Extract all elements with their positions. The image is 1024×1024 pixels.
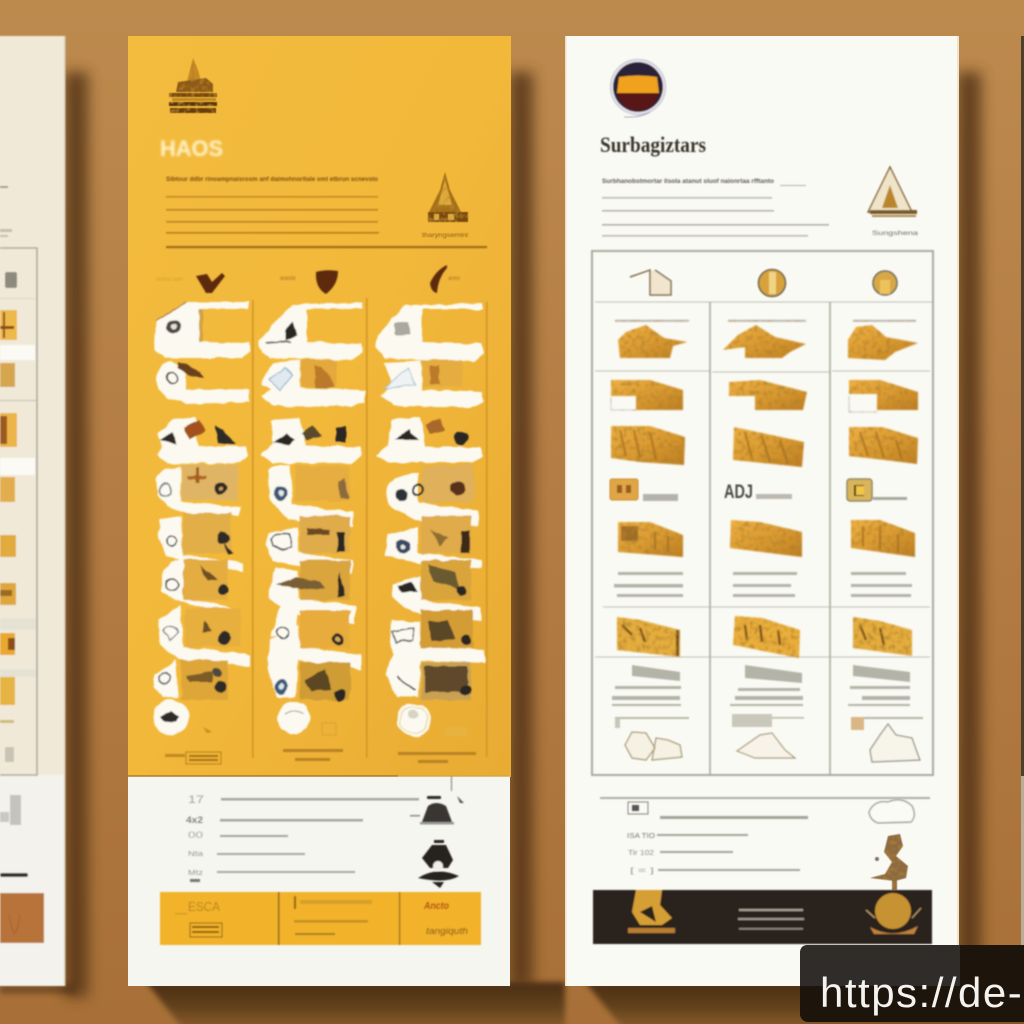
column 2 stepped cards <box>259 303 364 734</box>
gold row 3 <box>611 426 918 467</box>
icon: black stove <box>410 796 464 824</box>
dark footer bar <box>593 890 932 944</box>
panel: left cropped poster <box>0 36 66 986</box>
icon: small temple <box>422 172 468 239</box>
footer list: Mtz <box>188 870 204 877</box>
footer list: Tir 102 <box>628 850 654 857</box>
row icons <box>159 320 235 723</box>
gold row 1 <box>615 320 918 360</box>
footer list <box>600 797 930 875</box>
icon: black figure <box>418 840 459 888</box>
footer list: ISA TIO <box>627 833 656 840</box>
row images <box>181 465 241 700</box>
footer list <box>186 776 452 882</box>
footer list: [ = ] <box>630 868 654 875</box>
footer list: 17 <box>188 794 204 806</box>
icon: round logo <box>610 60 666 117</box>
row icons <box>385 322 472 719</box>
watermark: https://de- <box>820 969 1023 1016</box>
gold row 4 small <box>610 479 907 503</box>
left poster table border <box>0 248 37 775</box>
row text blocks lower <box>612 665 910 706</box>
column header icons: arena seri <box>156 277 183 283</box>
row images <box>421 360 474 700</box>
column 1 stepped cards <box>153 302 250 735</box>
column 3 caption <box>398 727 476 763</box>
icon: temple logo <box>169 58 217 113</box>
panel: far right poster edge <box>1021 36 1024 985</box>
footer list: 00 <box>188 830 203 840</box>
column 2 caption <box>283 723 343 761</box>
yellow footer bar: ESCA <box>188 899 220 914</box>
column header icons <box>156 265 461 294</box>
gold row 6 <box>617 616 912 658</box>
column 3 stepped cards <box>375 303 485 737</box>
sketch row <box>615 714 923 762</box>
row icons <box>265 322 348 714</box>
column 1 caption <box>165 727 221 764</box>
icon: sketch cloud <box>869 800 914 823</box>
gold row 5 <box>618 520 915 557</box>
icon: small temple: tharyngsemini <box>422 233 468 239</box>
column header icons: areo <box>448 276 461 282</box>
icon: gold temple <box>868 167 919 237</box>
row images <box>295 360 350 700</box>
title: Surbagiztars <box>600 132 706 157</box>
watermark <box>800 945 1024 1022</box>
title: HAOS <box>160 136 223 161</box>
footer list: 4x2 <box>186 815 203 825</box>
gold row 4 small: ADJ <box>724 482 753 503</box>
icon: gold right ornament <box>866 893 921 934</box>
icon: gold temple: Sungshena <box>872 231 919 237</box>
yellow footer bar: Ancto <box>423 901 449 912</box>
row text blocks <box>614 572 912 597</box>
icon: bronze figure <box>870 834 908 890</box>
yellow footer bar <box>160 892 481 945</box>
text block: intro: Surbhanobstmortar ilsola atanut sluof naionrtaa rfftanto <box>602 179 774 185</box>
column header icons: waste <box>279 276 296 282</box>
gold row 2 <box>611 380 918 412</box>
column rules <box>252 298 488 758</box>
icon: gold left ornament <box>628 890 675 933</box>
text block: intro: Sibtour ddbr rinoampnaisrosm anf daimohnoritale smt etbrun scnevsto <box>166 177 378 183</box>
left poster footer <box>0 795 44 943</box>
comparison table <box>592 251 933 775</box>
footer list: Nta <box>188 851 203 858</box>
panel: yellow poster <box>128 36 511 986</box>
bar text <box>738 909 804 930</box>
panel: white poster <box>565 36 959 986</box>
header icons <box>630 270 897 296</box>
yellow footer bar: tangiquth <box>426 926 468 936</box>
left poster rows <box>0 272 37 762</box>
